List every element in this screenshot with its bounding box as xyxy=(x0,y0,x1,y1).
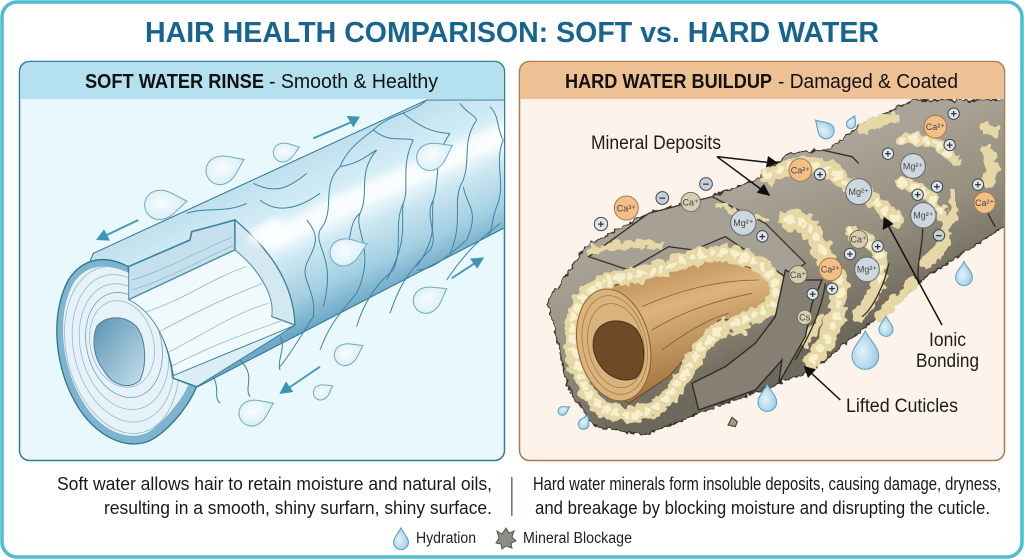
charge signs: + xyxy=(809,289,816,301)
shaft body xyxy=(67,100,510,443)
medulla hole xyxy=(94,318,145,386)
cortex xyxy=(128,250,295,383)
mineral deposit bands xyxy=(769,117,995,360)
charge signs: + xyxy=(914,190,921,202)
label: ionic bonding: Ionic xyxy=(929,330,966,351)
exposed cortex wood xyxy=(612,260,770,404)
ions: Mg²⁺ xyxy=(849,187,869,197)
cut-away far wall xyxy=(235,220,295,325)
charge signs: − xyxy=(659,193,666,205)
charge signs: − xyxy=(936,230,943,242)
end face xyxy=(576,288,652,402)
ions: Ca²⁺ xyxy=(821,265,840,275)
charge signs: + xyxy=(885,149,892,161)
heading: soft water rinse: - Smooth & Healthy xyxy=(269,70,439,93)
ions: Ca⁺ xyxy=(683,197,699,207)
text block: soft water summary: Soft water allows hair to retain moisture and natural oils, xyxy=(57,473,492,494)
panel: soft water xyxy=(20,62,510,460)
charge signs: + xyxy=(759,231,766,243)
ions: Ca²⁺ xyxy=(791,165,810,175)
ions: Mg²⁺ xyxy=(903,161,923,171)
cortex fibres xyxy=(132,237,283,370)
charge signs: + xyxy=(598,219,605,231)
water drops xyxy=(557,114,972,431)
charge signs: + xyxy=(934,182,941,194)
ions: Ca⁺ xyxy=(790,270,806,280)
ions: Ca³⁺ xyxy=(617,203,636,213)
charge markers xyxy=(594,108,984,300)
legend label: hydration: Hydration xyxy=(416,530,476,547)
end face cortex xyxy=(63,267,188,436)
end face rings xyxy=(64,266,178,434)
ions: Ca²⁺ xyxy=(975,198,995,208)
ions: Mg²⁺ xyxy=(733,218,754,228)
label: ionic bonding: Bonding xyxy=(916,351,979,372)
text block: soft water summary: resulting in a smooth, shiny surfarn, shiny surface. xyxy=(104,497,492,518)
upper lifted cuticle flap xyxy=(589,197,805,277)
water drops xyxy=(143,134,459,430)
legend label: mineral blockage: Mineral Blockage xyxy=(523,530,632,547)
ions: Cs xyxy=(799,312,811,322)
charge signs: + xyxy=(874,241,881,253)
icon: mineral blockage xyxy=(496,528,516,549)
panel: hard water xyxy=(520,62,1009,460)
label: lifted cuticles: Lifted Cuticles xyxy=(846,396,958,417)
medulla hole xyxy=(593,321,644,380)
cut-away lower wall xyxy=(167,325,295,387)
legend xyxy=(394,528,632,550)
charge signs: + xyxy=(847,249,854,261)
panel header: hard water xyxy=(520,62,1004,99)
ions: Mg²⁺ xyxy=(857,265,877,275)
heading: soft water rinse: SOFT WATER RINSE xyxy=(85,70,264,93)
ions: Mg²⁺ xyxy=(913,211,934,221)
cut-away top wall xyxy=(128,220,235,300)
charge signs: + xyxy=(946,140,953,152)
shine band xyxy=(272,121,504,242)
text block: hard water summary: and breakage by blocking moisture and disrupting the cuticle. xyxy=(535,497,990,518)
heading: hard water buildup: HARD WATER BUILDUP xyxy=(565,70,772,93)
cortex grain xyxy=(642,280,759,350)
specular glint xyxy=(246,216,284,247)
arrow: ionic bonding xyxy=(883,217,942,325)
illustration: damaged hair shaft xyxy=(548,100,1009,435)
lower lifted cuticle xyxy=(692,270,822,410)
ions xyxy=(614,115,995,325)
ions: Ca²⁺ xyxy=(926,122,945,132)
charge signs: + xyxy=(950,109,957,121)
debris xyxy=(728,417,737,427)
label: mineral deposits: Mineral Deposits xyxy=(591,133,721,154)
panel header: soft water xyxy=(20,62,504,99)
charge signs: − xyxy=(703,179,710,191)
title: HAIR HEALTH COMPARISON: SOFT vs. HARD WATER xyxy=(145,17,879,49)
divider xyxy=(511,477,513,516)
deposit rim xyxy=(572,205,777,415)
charge signs: + xyxy=(817,169,824,181)
charge signs xyxy=(598,109,982,301)
end face rim xyxy=(57,260,197,444)
arrow: lifted cuticles xyxy=(804,366,840,400)
heading: hard water buildup: - Damaged & Coated xyxy=(778,70,958,93)
flow arrows xyxy=(96,116,484,394)
charge signs: + xyxy=(829,284,836,296)
cuticle lines xyxy=(795,150,995,360)
arrow: mineral deposits xyxy=(717,156,779,196)
illustration: smooth hair shaft xyxy=(48,100,510,446)
shaft body xyxy=(548,100,1009,435)
charge signs: + xyxy=(975,180,982,192)
cuticle scales xyxy=(187,100,503,403)
ions: Ca⁺ xyxy=(851,235,867,245)
icon: hydration drop xyxy=(394,528,408,550)
